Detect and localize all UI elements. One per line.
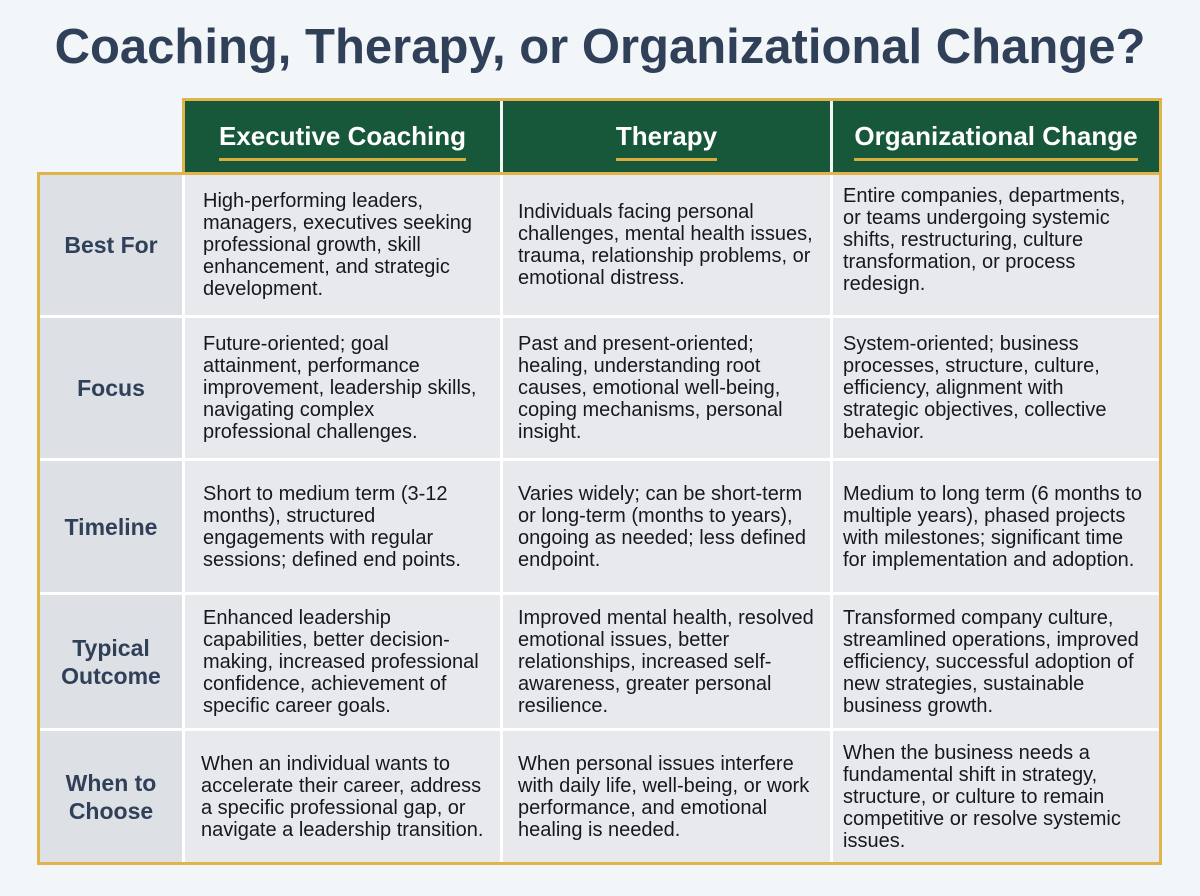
cell: org change when	[833, 731, 1159, 862]
cell: coaching focus: professional challenges.	[203, 421, 418, 443]
cell: org change best for: Entire companies, departments,	[843, 185, 1125, 207]
cell: org change timeline: multiple years), phased projects	[843, 504, 1125, 526]
cell: org change focus: strategic objectives, collective	[843, 399, 1106, 421]
cell: coaching outcome: making, increased professional	[203, 650, 479, 672]
cell: therapy focus	[503, 318, 830, 458]
cell: org change outcome: business growth.	[843, 694, 993, 716]
cell: org change timeline: with milestones; significant time	[843, 526, 1123, 548]
cell: coaching timeline: Short to medium term (3-12	[203, 482, 448, 504]
cell: coaching best for: High-performing leaders,	[203, 190, 423, 212]
cell: coaching best for: professional growth, skill	[203, 234, 421, 256]
cell: coaching when: When an individual wants to	[201, 752, 450, 774]
cell: therapy timeline: Varies widely; can be short-term	[518, 482, 802, 504]
cell: therapy focus: coping mechanisms, personal	[518, 399, 783, 421]
cell: coaching when: accelerate their career, address	[201, 774, 481, 796]
cell: coaching focus: navigating complex	[203, 399, 374, 421]
comparison table body	[37, 172, 1162, 865]
cell: therapy best for	[503, 175, 830, 315]
cell: org change focus: System-oriented; business	[843, 333, 1079, 355]
cell: coaching outcome: Enhanced leadership	[203, 606, 391, 628]
cell: therapy focus: insight.	[518, 421, 581, 443]
header row	[182, 98, 1162, 175]
cell: org change timeline	[833, 461, 1159, 592]
cell: org change when: structure, or culture to remain	[843, 786, 1104, 808]
header: executive coaching: Executive Coaching	[219, 121, 466, 151]
row label: typical outcome	[40, 595, 182, 728]
cell: org change best for	[833, 175, 1159, 315]
cell: coaching timeline: sessions; defined end points.	[203, 548, 461, 570]
cell: coaching best for: managers, executives seeking	[203, 212, 472, 234]
cell: coaching when	[185, 731, 500, 862]
cell: org change focus: processes, structure, culture,	[843, 355, 1100, 377]
cell: coaching timeline	[185, 461, 500, 592]
cell: coaching timeline: months), structured	[203, 504, 375, 526]
cell: org change when: When the business needs a	[843, 742, 1090, 764]
cell: therapy focus: Past and present-oriented;	[518, 333, 754, 355]
header: therapy: Therapy	[616, 121, 717, 151]
cell: coaching outcome: confidence, achievement of	[203, 672, 446, 694]
cell: therapy timeline: or long-term (months to years),	[518, 504, 793, 526]
cell: org change when: competitive or resolve systemic	[843, 808, 1121, 830]
cell: therapy timeline: endpoint.	[518, 548, 600, 570]
cell: therapy focus: causes, emotional well-being,	[518, 377, 780, 399]
cell: therapy when	[503, 731, 830, 862]
cell: coaching when: navigate a leadership transition.	[201, 818, 483, 840]
cell: org change focus	[833, 318, 1159, 458]
cell: therapy best for: trauma, relationship problems, or	[518, 245, 810, 267]
cell: coaching best for: development.	[203, 278, 323, 300]
cell: org change best for: or teams undergoing systemic	[843, 207, 1110, 229]
cell: therapy best for: Individuals facing personal	[518, 201, 754, 223]
cell: org change outcome: streamlined operations, improved	[843, 628, 1139, 650]
cell: org change outcome: Transformed company culture,	[843, 606, 1113, 628]
cell: org change best for: redesign.	[843, 273, 925, 295]
cell: therapy outcome: resilience.	[518, 694, 608, 716]
row label: when to choose: When to	[66, 770, 156, 796]
cell: org change timeline: for implementation and adoption.	[843, 548, 1134, 570]
row label: timeline	[40, 461, 182, 592]
cell: therapy outcome: Improved mental health, resolved	[518, 606, 814, 628]
cell: org change best for: transformation, or process	[843, 251, 1075, 273]
cell: coaching timeline: engagements with regular	[203, 526, 433, 548]
row label: timeline: Timeline	[65, 514, 157, 540]
cell: therapy when: healing is needed.	[518, 818, 680, 840]
cell: org change best for: shifts, restructuring, culture	[843, 229, 1083, 251]
cell: therapy timeline	[503, 461, 830, 592]
cell: coaching focus: Future-oriented; goal	[203, 333, 389, 355]
cell: org change focus: efficiency, alignment with	[843, 377, 1063, 399]
cell: coaching focus	[185, 318, 500, 458]
row label: focus: Focus	[77, 375, 145, 401]
cell: org change when: issues.	[843, 830, 905, 852]
cell: therapy focus: healing, understanding root	[518, 355, 760, 377]
cell: coaching best for: enhancement, and strategic	[203, 256, 450, 278]
cell: therapy when: performance, and emotional	[518, 796, 767, 818]
cell: org change timeline: Medium to long term (6 months to	[843, 482, 1142, 504]
cell: org change focus: behavior.	[843, 421, 924, 443]
cell: org change outcome: efficiency, successful adoption of	[843, 650, 1134, 672]
row label: when to choose: Choose	[69, 798, 153, 824]
cell: therapy when: with daily life, well-being, or work	[518, 774, 809, 796]
cell: coaching outcome: specific career goals.	[203, 694, 391, 716]
row label: best for	[40, 175, 182, 315]
cell: therapy outcome	[503, 595, 830, 728]
cell: therapy best for: challenges, mental health issues,	[518, 223, 813, 245]
cell: therapy outcome: awareness, greater personal	[518, 672, 771, 694]
row label: focus	[40, 318, 182, 458]
cell: coaching when: a specific professional gap, or	[201, 796, 466, 818]
cell: therapy best for: emotional distress.	[518, 267, 685, 289]
cell: coaching focus: attainment, performance	[203, 355, 420, 377]
row label: best for: Best For	[64, 232, 158, 258]
cell: coaching best for	[185, 175, 500, 315]
row label: when to choose	[40, 731, 182, 862]
title: Coaching, Therapy, or Organizational Change?	[55, 20, 1145, 74]
row label: typical outcome: Outcome	[61, 662, 161, 688]
cell: therapy outcome: emotional issues, better	[518, 628, 729, 650]
cell: therapy when: When personal issues interfere	[518, 752, 794, 774]
cell: org change when: fundamental shift in strategy,	[843, 764, 1097, 786]
header: organizational change: Organizational Change	[854, 121, 1138, 151]
cell: org change outcome	[833, 595, 1159, 728]
cell: coaching outcome	[185, 595, 500, 728]
cell: coaching focus: improvement, leadership skills,	[203, 377, 476, 399]
cell: therapy outcome: relationships, increased self-	[518, 650, 771, 672]
row label: typical outcome: Typical	[72, 634, 150, 660]
cell: org change outcome: new strategies, sustainable	[843, 672, 1084, 694]
cell: therapy timeline: ongoing as needed; less defined	[518, 526, 806, 548]
cell: coaching outcome: capabilities, better decision-	[203, 628, 450, 650]
